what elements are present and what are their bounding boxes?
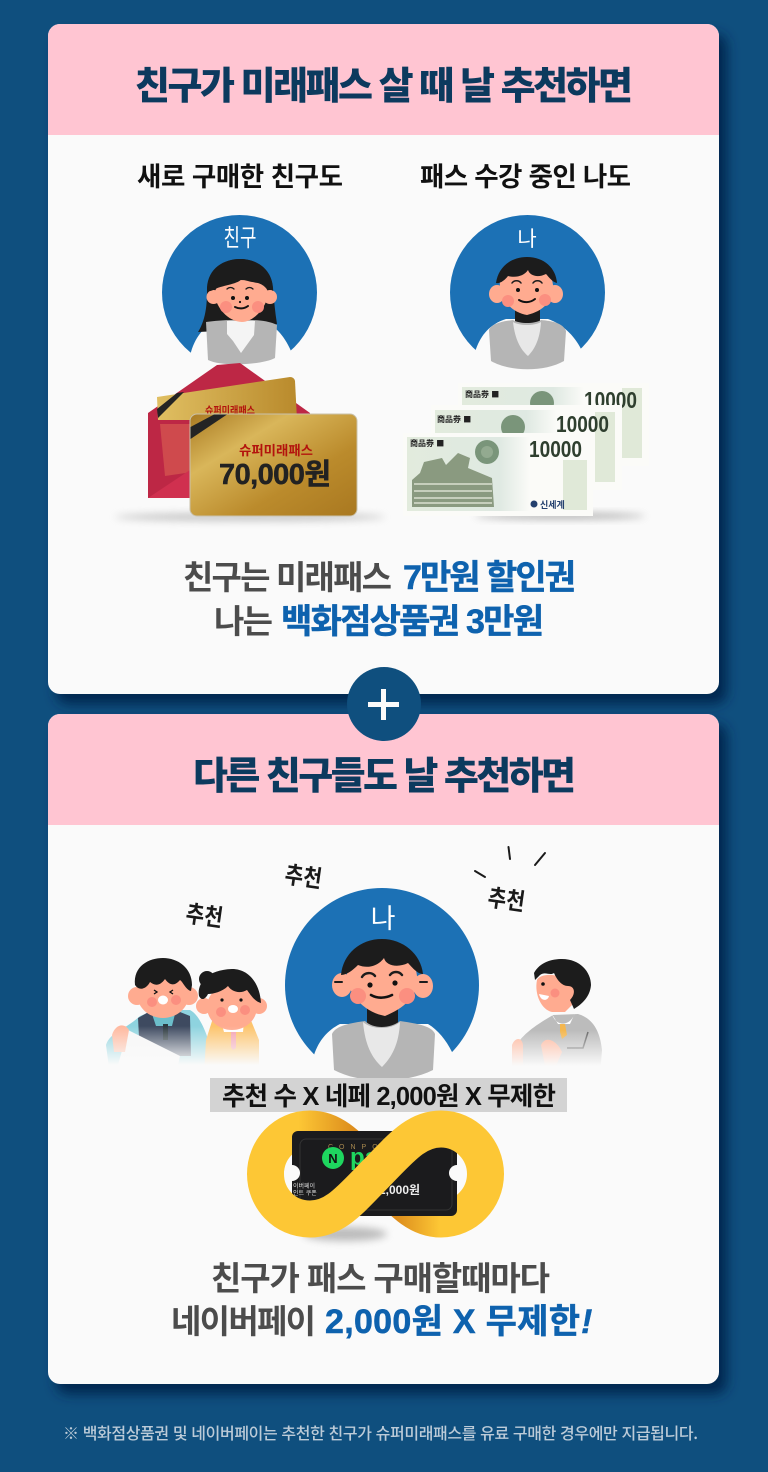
fade over right friend bbox=[505, 1030, 610, 1078]
text: naver pay unlimited: 2,000원 X 무제한 bbox=[325, 1303, 580, 1341]
icon: me avatar: 나 bbox=[517, 223, 537, 253]
icon: large me avatar bbox=[285, 888, 479, 1082]
text: naver pay unlimited: ! bbox=[581, 1303, 592, 1341]
icon: friend on right bbox=[512, 959, 602, 1075]
fade over friend figures bbox=[95, 1026, 270, 1078]
icon: red envelope with gold cards bbox=[115, 363, 385, 521]
heading: panel one title: 친구가 미래패스 살 때 날 추천하면 bbox=[135, 55, 633, 110]
icon: infinity with naver pay ticket: 이버페이 bbox=[293, 1181, 315, 1190]
text: friend reward: 7만원 할인권 bbox=[403, 559, 576, 597]
icon: plus badge bbox=[347, 667, 421, 741]
heading: panel two title: 다른 친구들도 날 추천하면 bbox=[193, 745, 576, 800]
icon: friend with bun bbox=[196, 969, 267, 1075]
icon: infinity with naver pay ticket: N bbox=[328, 1151, 338, 1166]
icon: infinity with naver pay ticket bbox=[266, 1129, 486, 1241]
text: my reward: 나는 bbox=[214, 595, 273, 643]
icon: large me avatar: 나 bbox=[371, 897, 395, 936]
subheading: me: 패스 수강 중인 나도 bbox=[420, 155, 631, 194]
icon: me avatar bbox=[450, 215, 605, 385]
panel: other friends recommend bbox=[48, 714, 727, 1394]
icon: red envelope with gold cards: 슈퍼미래패스 bbox=[239, 440, 313, 459]
text: friend reward bbox=[183, 551, 576, 599]
label: handwritten recommend left: 추천 bbox=[184, 894, 225, 933]
text bar: formula: 추천 수 X 네페 2,000원 X 무제한 bbox=[222, 1083, 556, 1111]
icon: infinity with naver pay ticket: CONPON bbox=[328, 1144, 395, 1151]
icon: department store gift vouchers: 10000 bbox=[556, 411, 609, 437]
text: naver pay unlimited: 네이버페이 bbox=[171, 1295, 316, 1343]
icon: red envelope with gold cards: 70,000원 bbox=[219, 458, 331, 491]
icon: department store gift vouchers: 商品券 ■ bbox=[465, 389, 499, 400]
icon: department store gift vouchers bbox=[403, 383, 649, 519]
icon: infinity with naver pay ticket: 인트 쿠폰 bbox=[293, 1188, 317, 1197]
text: friend reward: 친구는 미래패스 bbox=[183, 551, 392, 599]
icon: department store gift vouchers: 10000 bbox=[584, 387, 637, 413]
icon: sparks bbox=[475, 847, 545, 877]
icon: department store gift vouchers: 10000 bbox=[529, 436, 582, 462]
label: handwritten recommend right: 추천 bbox=[486, 878, 527, 917]
icon: friend avatar bbox=[162, 215, 317, 380]
panel: friend recommends when buying bbox=[48, 24, 727, 704]
footnote: ※ 백화점상품권 및 네이버페이는 추천한 친구가 슈퍼미래패스를 유료 구매한 경우에만 지급됩니다. bbox=[63, 1420, 698, 1444]
text: every purchase: 친구가 패스 구매할때마다 bbox=[211, 1252, 550, 1300]
icon: infinity with naver pay ticket: 2,000원 bbox=[379, 1183, 420, 1197]
icon: friend with paper bbox=[106, 958, 214, 1075]
icon: department store gift vouchers: 신세계 bbox=[540, 498, 565, 511]
icon: red envelope with gold cards: 슈퍼미래패스 bbox=[205, 402, 255, 417]
text: naver pay unlimited bbox=[171, 1295, 592, 1343]
icon: friend avatar: 친구 bbox=[224, 218, 256, 253]
icon: infinity with naver pay ticket: pay bbox=[350, 1144, 392, 1171]
text: my reward: 백화점상품권 3만원 bbox=[281, 603, 544, 641]
subheading: friend: 새로 구매한 친구도 bbox=[137, 155, 343, 194]
text: my reward bbox=[214, 595, 544, 643]
icon: department store gift vouchers: 商品券 ■ bbox=[437, 414, 471, 425]
icon: department store gift vouchers: 商品券 ■ bbox=[410, 438, 444, 449]
label: handwritten recommend centre: 추천 bbox=[283, 855, 324, 894]
